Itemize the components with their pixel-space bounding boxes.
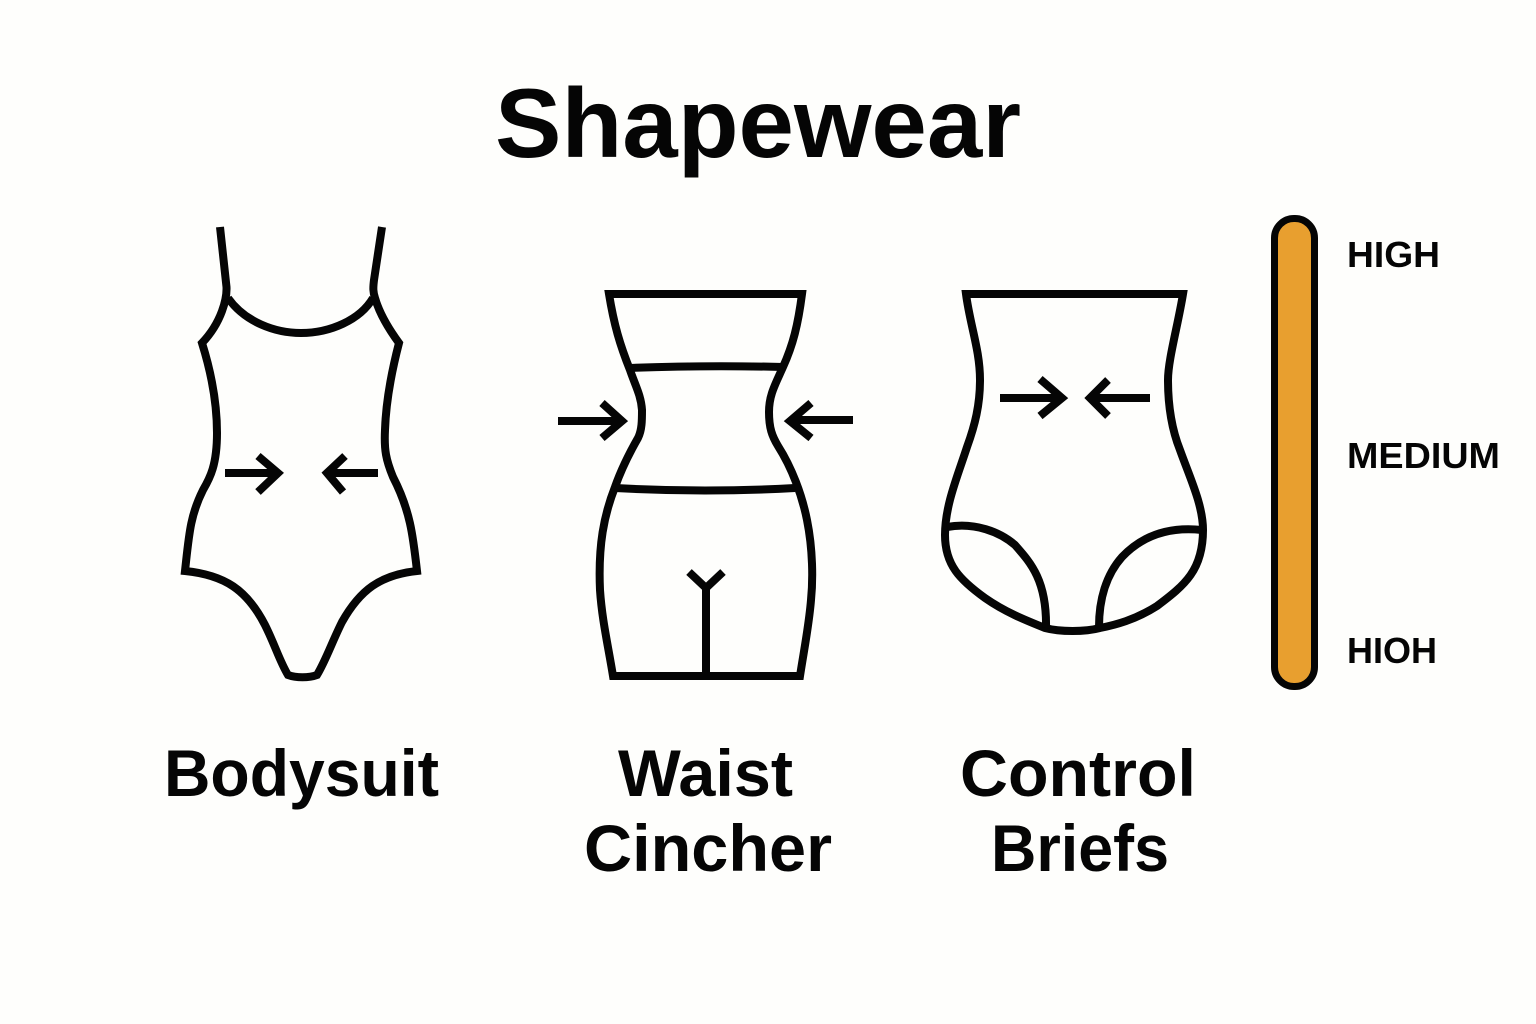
arrow: left inward bbox=[1000, 379, 1062, 416]
icon: control briefs bbox=[945, 294, 1203, 631]
bodysuit outline bbox=[185, 227, 417, 677]
label: waist cincher: Cincher bbox=[584, 811, 832, 885]
arrow: left inward bbox=[558, 403, 622, 438]
label: control briefs bbox=[960, 736, 1196, 885]
scale label: high: HIGH bbox=[1347, 234, 1440, 275]
arrow: left inward bbox=[225, 456, 278, 492]
cincher lower band bbox=[615, 488, 795, 490]
intensity scale bar bbox=[1274, 218, 1314, 686]
cincher outline bbox=[600, 294, 812, 676]
icon: bodysuit bbox=[185, 227, 417, 677]
briefs outline bbox=[945, 294, 1203, 631]
title: Shapewear bbox=[495, 68, 1021, 178]
arrow: right inward bbox=[790, 403, 853, 438]
label: control briefs: Control bbox=[960, 736, 1196, 810]
scale label: medium: MEDIUM bbox=[1347, 435, 1500, 476]
arrow: right inward bbox=[1090, 380, 1150, 416]
label: bodysuit: Bodysuit bbox=[164, 736, 439, 810]
cincher upper band bbox=[630, 366, 783, 368]
icon: waist cincher bbox=[558, 294, 853, 676]
label: waist cincher: Waist bbox=[618, 736, 793, 810]
label: control briefs: Briefs bbox=[991, 811, 1169, 885]
left leg opening bbox=[947, 526, 1046, 628]
bodysuit neckline bbox=[228, 298, 373, 333]
arrow: right inward bbox=[327, 456, 378, 492]
scale label: hioh: HIOH bbox=[1347, 630, 1437, 671]
center seam bbox=[689, 572, 723, 676]
right leg opening bbox=[1099, 529, 1202, 627]
label: waist cincher bbox=[584, 736, 832, 885]
